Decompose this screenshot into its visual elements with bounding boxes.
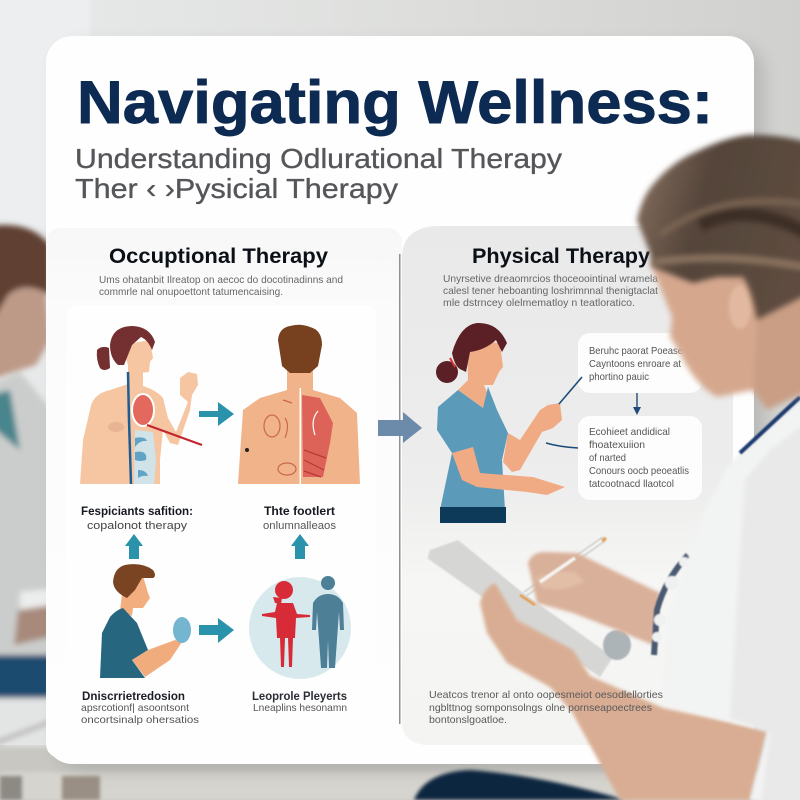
heading: physical therapy: Physical Therapy <box>472 245 650 268</box>
label: bottom right step: Lneaplins hesonamn <box>253 702 347 714</box>
footer text: Ueatcos trenor al onto oopesmeiot oesodlellorties <box>429 689 663 701</box>
label: top left step: copalonot therapy <box>87 520 188 532</box>
arrow: up left <box>125 534 143 559</box>
panel: physical therapy <box>402 226 733 745</box>
callout: lower box: Conours oocb peoeatlis <box>589 465 689 477</box>
tablet <box>427 540 631 677</box>
stethoscope <box>652 555 689 655</box>
subtitle <box>75 143 562 204</box>
label: top left step: Fespiciants safition: <box>81 504 193 518</box>
collar line <box>740 397 800 453</box>
intro text: calesl tener heboanting loshrimnnal thenigtaclat <box>443 285 658 297</box>
label: bottom left step: apsrcotionf| asoontsont <box>81 702 189 714</box>
figure: two people in circle <box>249 576 351 679</box>
panel: occupational therapy <box>46 228 402 758</box>
label: top right step: onlumnalleaos <box>263 520 337 532</box>
connector: pen to top box <box>559 377 582 404</box>
callout: top box: Beruhc paorat Poease <box>589 345 683 357</box>
subtitle: Understanding Odlurational Therapy <box>75 143 562 174</box>
arrow: to physical therapy <box>378 412 422 443</box>
footer text: ngblttnog somponsolngs olne pornseapoectrees <box>429 702 652 714</box>
hair <box>637 135 800 320</box>
label: bottom left step: Dniscrrietredosion <box>82 689 185 703</box>
callout: lower box <box>578 416 702 500</box>
label: bottom left step: oncortsinalp ohersatios <box>81 714 199 726</box>
footer text <box>429 689 663 726</box>
orange pen tip <box>520 595 535 605</box>
figure: woman in teal shirt <box>436 323 565 523</box>
connector: hand to lower box <box>546 443 578 448</box>
background colleague in white coat <box>0 225 60 746</box>
title: Navigating Wellness: <box>77 69 713 136</box>
figure: woman torso with organs <box>80 326 202 484</box>
label: top right step: Thte footlert <box>264 504 335 518</box>
foreground nurse photo <box>427 135 800 800</box>
figure: back view with muscles <box>238 325 360 484</box>
label: bottom right step <box>252 689 347 714</box>
neck and face <box>650 240 800 410</box>
arrow: man to people <box>199 618 234 643</box>
intro text: commrle nal onupoettont tatumencaising. <box>99 286 283 298</box>
label: top right step <box>263 504 337 532</box>
left hand and forearm <box>480 583 767 800</box>
divider line <box>399 254 400 724</box>
pen <box>525 538 606 594</box>
arrow: torso to back <box>199 402 234 426</box>
right hand with pen <box>528 552 660 645</box>
callout: lower box: tatcootnacd llaotcol <box>589 478 674 490</box>
callout: lower box: fhoatexuiion <box>589 439 645 451</box>
subtitle: Ther ‹ ›Pysicial Therapy <box>75 173 398 204</box>
callout: lower box: of narted <box>589 452 626 464</box>
label: bottom left step <box>81 689 199 726</box>
callout: top box: phortino pauic <box>589 371 649 383</box>
intro text: Ums ohatanbit Ilreatop on aecoc do docotinadinns and <box>99 274 343 286</box>
label: top left step <box>81 504 193 532</box>
footer text: bontonslgoatloe. <box>429 714 507 726</box>
heading: occupational therapy: Occuptional Therapy <box>109 245 328 268</box>
arrow: top box to lower box <box>633 393 641 415</box>
pen tip over fingers <box>540 558 575 582</box>
figure: man with therapy ball <box>100 564 191 678</box>
intro text: Unyrsetive dreaomrcios thoceoointinal wramela <box>443 273 658 285</box>
dark trousers in the background <box>414 770 625 800</box>
intro text <box>443 273 658 309</box>
white shirt <box>663 400 800 800</box>
callout: top box: Cayntoons enroare at <box>589 358 681 370</box>
callout: lower box: Ecohieet andidical <box>589 426 670 438</box>
arrow: up right <box>291 534 309 559</box>
intro text: mle dstrncey olelmematloy n teatloratico. <box>443 297 635 309</box>
intro text <box>99 274 343 298</box>
ear <box>729 285 751 329</box>
callout: top box <box>578 333 702 393</box>
label: bottom right step: Leoprole Pleyerts <box>252 689 347 703</box>
